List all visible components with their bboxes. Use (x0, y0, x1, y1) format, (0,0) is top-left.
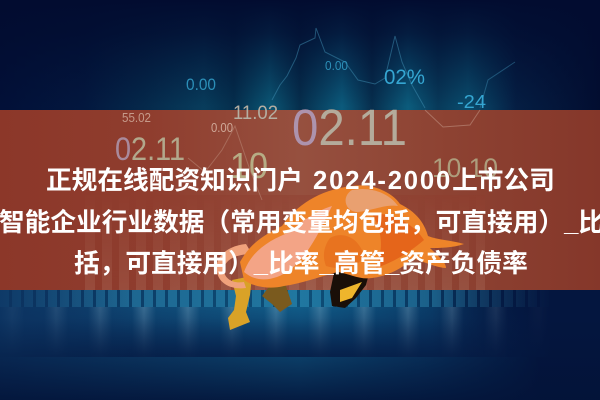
band value: 55.02: 55.02 (122, 110, 151, 125)
bull: horn (217, 244, 252, 288)
floor stripes (0, 290, 600, 307)
band value: 0.00: 0.00 (211, 120, 233, 135)
line chart trace (188, 28, 515, 200)
title line 1: 正规在线配资知识门户 2024-2000上市公司 (46, 167, 555, 195)
floor fade to navy (0, 318, 600, 400)
bull: pale head and shoulder highlight (244, 206, 332, 279)
lower floor with reflections (0, 288, 600, 400)
band value: 10: 10 (230, 145, 268, 186)
chart value: 0.00: 0.00 (186, 75, 216, 94)
chart value: -24: -24 (457, 92, 486, 112)
chart value: small 0.00: 0.00 (325, 58, 348, 73)
title line 2: 智能企业行业数据（常用变量均包括，可直接用）_比 (0, 209, 600, 237)
rust overlay band (0, 110, 600, 290)
bull illustration (217, 185, 464, 330)
chart value: 02%: 02% (384, 66, 425, 89)
bull: body (240, 185, 464, 288)
band value: small 02.11: 02.11 (115, 131, 185, 167)
chart value: 11.02: 11.02 (233, 103, 278, 124)
bull: front leg (228, 276, 252, 330)
dark background: upper chart area (0, 0, 600, 112)
faded bars in band (85, 195, 485, 290)
bull: second front leg (262, 280, 292, 312)
band value: large 02.11: 02.11 (292, 99, 407, 156)
bull: chest shading (372, 214, 424, 268)
bull: back shading (346, 189, 398, 212)
title line 3: 括，可直接用）_比率_高管_资产负债率 (74, 250, 528, 278)
band value: 10.10: 10.10 (432, 153, 498, 183)
floor reflection streaks (0, 307, 600, 357)
bull: flank shading (324, 235, 364, 268)
bull: hind leg (330, 262, 372, 308)
